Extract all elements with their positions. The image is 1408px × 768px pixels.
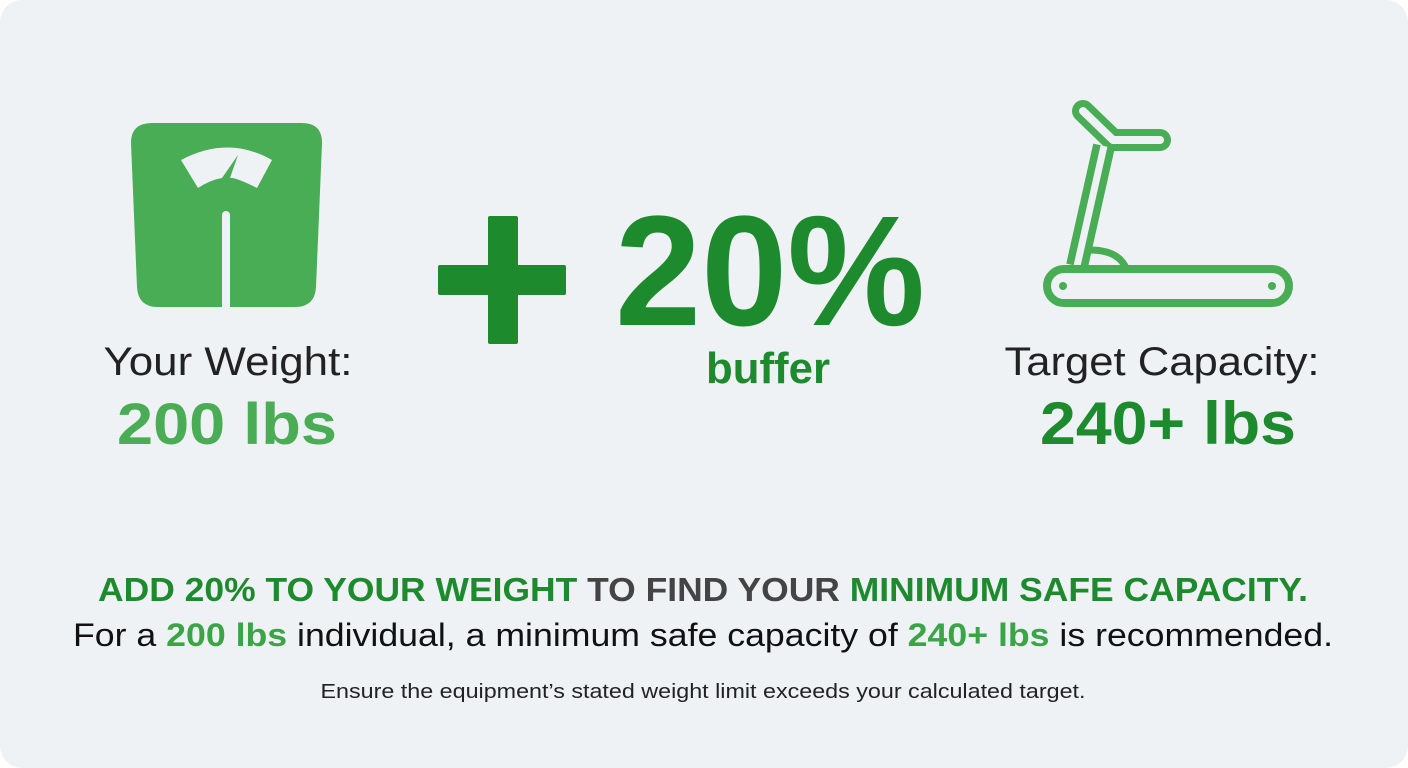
explanation sentence: For a 200 lbs individual, a minimum safe capacity of 240+ lbs is recommended. bbox=[73, 617, 1333, 653]
icon: treadmill bbox=[1047, 111, 1289, 303]
text: buffer: buffer bbox=[706, 344, 830, 393]
icon: plus sign bbox=[438, 216, 566, 344]
text: 20%: 20% bbox=[615, 184, 925, 359]
text: 200 lbs: 200 lbs bbox=[117, 392, 337, 457]
text: 240+ lbs: 240+ lbs bbox=[1040, 390, 1296, 457]
footnote: Ensure the equipment’s stated weight limit exceeds your calculated target. bbox=[320, 681, 1086, 703]
text: your weight label: Your Weight: bbox=[104, 340, 352, 384]
icon: bathroom scale bbox=[131, 123, 322, 310]
text: target capacity label: Target Capacity: bbox=[1004, 340, 1320, 384]
headline rule: ADD 20% TO YOUR WEIGHT TO FIND YOUR MINIMUM SAFE CAPACITY. bbox=[98, 571, 1308, 608]
